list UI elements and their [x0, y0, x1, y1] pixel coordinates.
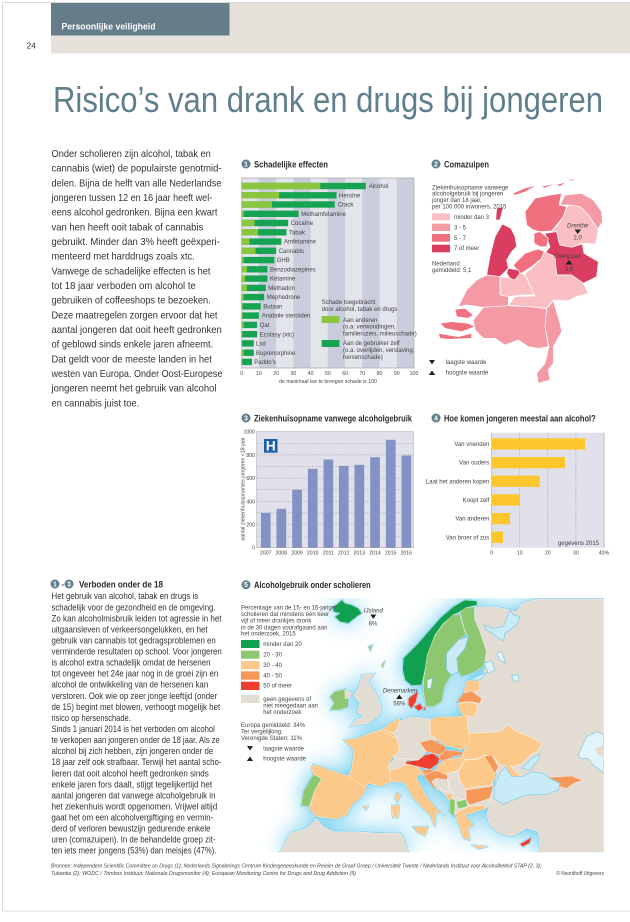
bar labels: Koopt zelf: [463, 498, 490, 504]
bar labels: Laat het anderen kopen: [426, 479, 489, 485]
map legend: minder dan 20: [263, 642, 302, 648]
text block: verboden onder de 18: Het gebruik van alcohol, tabak en drugs is: [52, 591, 199, 601]
callout: denemarken highest: [383, 688, 418, 707]
legend: harm type: (o.a. overlijden, verslaving,: [343, 348, 415, 354]
x axis: 50: [325, 371, 331, 377]
callout: denemarken highest: 56%: [393, 701, 406, 707]
intro text: aantal jongeren dat ooit heeft gedronken: [52, 325, 222, 336]
callout: drenthe lowest: Drenthe: [567, 224, 589, 230]
text block: verboden onder de 18: Zo kan alcoholmisbruik leiden tot agressie in het: [52, 613, 222, 623]
text block: verboden onder de 18: te verkopen aan jongeren onder de 18 jaar. Als ze: [52, 735, 220, 745]
x axis: 0: [240, 371, 243, 377]
chart area: [492, 433, 604, 548]
map legend: Nederland: [432, 261, 460, 267]
text block: verboden onder de 18: het ziekenhuis wordt opgenomen. Vrijwel altijd: [52, 802, 217, 812]
intro text: menteerd met harddrugs zoals xtc.: [52, 252, 195, 263]
panel: hoe komen jongeren aan alcohol: [426, 414, 610, 557]
heading: verboden onder de 18: 3: [67, 582, 71, 588]
x axis: years: [260, 550, 412, 556]
text block: verboden onder de 18: alcohol bij zich hebben, zijn jongeren onder de: [52, 746, 213, 756]
x axis: 30: [291, 371, 296, 377]
map key: lowest and highest: laagste waarde: [263, 746, 305, 752]
text block: verboden onder de 18: aantal jongeren dat vanwege alcoholgebruik in: [52, 790, 216, 800]
text block: verboden onder de 18: lieren dat ooit alcohol heeft gedronken sinds: [52, 768, 209, 778]
bar labels: Van broer of zus: [446, 535, 489, 541]
bar labels: Mephedrone: [267, 295, 301, 301]
map legend: geen gegevens of: [263, 697, 311, 703]
x axis: years: 2009: [291, 550, 303, 556]
heading: alcoholgebruik onder scholieren: Alcoholgebruik onder scholieren: [254, 580, 371, 590]
legend: harm type: (o.a. verwondingen,: [343, 325, 396, 331]
heading: verboden onder de 18: 1: [53, 582, 57, 588]
heading: bron van alcohol: 4: [434, 416, 438, 422]
averages: Europa gemiddeld: 34%: [241, 723, 306, 729]
x axis: 30: [573, 551, 579, 557]
map legend: niet meegedaan aan: [263, 703, 318, 709]
intro text: Dat geldt voor de meeste landen in het: [52, 354, 212, 365]
x axis: years: 2013: [354, 550, 365, 556]
bar labels: Ecstasy (xtc): [260, 332, 294, 338]
x axis: years: 2008: [276, 550, 287, 556]
x axis: [490, 551, 610, 557]
map legend: 40 - 50: [263, 673, 283, 679]
bar labels: Van ouders: [459, 461, 489, 467]
x axis: years: 2007: [260, 550, 272, 556]
panel: schadelijke effecten: [240, 160, 418, 385]
heading: comazuipen: Comazuipen: [444, 160, 489, 170]
x axis: 10: [517, 551, 523, 557]
heading: verboden onder de 18: -: [62, 580, 64, 589]
panel: alcoholgebruik onder scholieren: [241, 580, 604, 852]
map key: lowest and highest: laagste waarde: [446, 360, 487, 366]
legend: harm type: Aan de gebruiker zelf: [343, 341, 400, 347]
map key: lowest and highest: [429, 360, 489, 377]
map legend: gemiddeld: 5,1: [432, 268, 472, 274]
heading: schadelijke effecten: Schadelijke effecten: [254, 160, 328, 170]
intro text: cannabis (wiet) de populairste genotmid-: [52, 164, 222, 175]
intro text: gebruiken of coffeeshops te bezoeken.: [52, 296, 211, 307]
x axis: years: 2016: [401, 550, 412, 556]
legend: harm type: [322, 300, 417, 361]
callout: ijsland lowest: [364, 608, 383, 628]
x axis: 90: [394, 371, 400, 377]
bar labels: Methadon: [268, 286, 295, 292]
y axis: 600: [246, 476, 255, 482]
map intro text: jonger dan 18 jaar,: [431, 198, 482, 204]
map legend: minder dan 3: [454, 215, 490, 221]
intro text: tot 18 jaar verboden om alcohol te: [52, 281, 196, 292]
bar labels: Butaan: [263, 304, 282, 310]
x axis: 100: [410, 371, 418, 377]
intro text: jongeren neemt het gebruik van alcohol: [51, 384, 217, 395]
y axis: 800: [246, 453, 255, 459]
intro text: of geblowd sinds enkele jaren afneemt.: [52, 340, 213, 351]
bar labels: Amfetamine: [284, 240, 317, 246]
x axis: years: 2015: [385, 550, 397, 556]
bar labels: Cocaïne: [291, 221, 314, 227]
bar labels: Benzodiazepines: [270, 267, 316, 273]
sources: [51, 864, 542, 877]
x axis: 20: [273, 371, 279, 377]
header band: [51, 3, 630, 54]
x axis: 10: [256, 371, 262, 377]
heading: bron van alcohol: Hoe komen jongeren meestal aan alcohol?: [444, 414, 596, 424]
intro text: [51, 149, 223, 409]
y axis: 1000: [243, 430, 255, 436]
map legend: het onderzoek: [263, 710, 302, 716]
callout: drenthe lowest: 2,0: [574, 236, 583, 242]
map intro text: per 100.000 inwoners, 2015: [432, 204, 507, 210]
heading: schadelijke effecten: 1: [244, 162, 248, 168]
map key: lowest and highest: hoogste waarde: [263, 757, 307, 763]
callout: overijssel highest: [554, 254, 581, 273]
bar chart: sources: [492, 438, 585, 543]
map legend intro: scholieren dat minstens één keer: [241, 612, 329, 618]
legend: harm type: Schade toegebracht: [322, 300, 376, 306]
legend: harm type: hersenschade): [343, 355, 383, 361]
map legend intro: het onderzoek, 2015: [241, 632, 296, 638]
map legend intro: in de 30 dagen voorafgaand aan: [241, 625, 327, 631]
y axis: aantal ziekenhuisopnames jongeren <18 jaar: [240, 437, 246, 541]
map key: lowest and highest: hoogste waarde: [446, 371, 489, 377]
heading: ziekenhuisopname: 3: [244, 416, 248, 422]
x axis: 40%: [599, 551, 610, 557]
heading: verboden onder de 18: Verboden onder de 18: [79, 580, 163, 590]
heading: ziekenhuisopname: Ziekenhuisopname vanwege alcoholgebruik: [254, 414, 413, 424]
sources: Tubantia (2); WODC / Trimbos Instituut: Nationale Drugsmonitor (4); European Monitoring Centre for Drugs and Drug Addiction (5): [51, 871, 356, 877]
bar labels: [254, 184, 388, 366]
bar labels: Methamfetamine: [301, 212, 347, 218]
copyright: © Noordhoff Uitgevers: [556, 870, 604, 877]
data note: gegevens 2015: [558, 541, 600, 547]
callout: overijssel highest: Overijssel: [554, 254, 581, 260]
legend: harm type: door alcohol, tabak en drugs: [322, 307, 397, 313]
bar labels: Heroïne: [339, 193, 361, 199]
legend: harm type: Aan anderen: [343, 318, 377, 324]
heading: verboden onder de 18: [50, 580, 163, 590]
intro text: Vanwege de schadelijke effecten is het: [52, 266, 211, 277]
x axis: 20: [545, 551, 551, 557]
map legend: 7 of meer: [454, 246, 479, 252]
text block: verboden onder de 18: tot ongeveer het 24e jaar nog in de groei zijn en: [52, 669, 218, 679]
y axis: 200: [246, 522, 255, 528]
bar labels: Van anderen: [455, 517, 489, 523]
bar chart: harm scores: [242, 183, 366, 365]
text block: verboden onder de 18: de 15) begint met blowen, verhoogt mogelijk het: [52, 702, 221, 712]
bar labels: Ketamine: [270, 277, 296, 283]
heading: alcoholgebruik onder scholieren: 5: [244, 582, 248, 589]
bar labels: Buprenorphine: [256, 351, 296, 357]
heading: comazuipen: 2: [434, 162, 438, 168]
intro text: Onder scholieren zijn alcohol, tabak en: [52, 149, 211, 160]
bar labels: Crack: [338, 203, 354, 209]
map legend intro: [241, 606, 336, 638]
map key: lowest and highest: [247, 746, 307, 763]
callout: denemarken highest: Denemarken: [383, 688, 418, 694]
bar labels: Tabak: [289, 230, 306, 236]
callout: ijsland lowest: IJsland: [364, 608, 383, 614]
bar chart: admissions: [261, 440, 411, 548]
map legend: 20 - 30: [263, 653, 283, 659]
text block: verboden onder de 18: derd of verloren bewustzijn gedurende enkele: [52, 824, 210, 834]
averages: [241, 723, 306, 742]
intro text: delen. Bijna de helft van alle Nederlandse: [52, 178, 222, 189]
map intro text: alcoholgebruik bij jongeren: [432, 192, 503, 198]
bar labels: Paddo’s: [254, 360, 276, 366]
x axis: years: 2014: [369, 550, 381, 556]
bar labels: Van vrienden: [454, 442, 489, 448]
chart area: [257, 432, 413, 548]
x axis: 0: [490, 551, 493, 557]
text block: verboden onder de 18: ten iets meer jongens (53%) dan meisjes (47%).: [52, 846, 216, 856]
callout: drenthe lowest: [567, 224, 589, 242]
icon: hospital: H: [266, 439, 276, 454]
intro text: en cannabis juist toe.: [52, 398, 139, 409]
intro text: Deze maatregelen zorgen ervoor dat het: [52, 310, 218, 321]
text block: verboden onder de 18: alcohol de ontwikkeling van de hersenen kan: [52, 680, 208, 690]
x axis: 80: [377, 371, 382, 377]
map intro text: [431, 185, 509, 210]
y axis: 0: [252, 546, 255, 552]
bar labels: Cannabis: [279, 249, 304, 255]
page number: 24: [26, 40, 36, 50]
map intro text: Ziekenhuisopname vanwege: [432, 185, 509, 191]
text block: verboden onder de 18: 18 jaar zelf ook strafbaar. Terwijl het aantal scho-: [52, 757, 222, 767]
text block: verboden onder de 18: enkele jaren fors daalt, stijgt tegelijkertijd het: [52, 779, 213, 789]
map legend: 50 of meer: [263, 684, 292, 690]
callout: overijssel highest: 3,6: [565, 267, 574, 273]
map legend: 30 - 40: [263, 663, 283, 669]
map legend: 3 - 5: [454, 226, 467, 232]
sources: Bronnen: Independent Scientific Committee on Drugs (1); Nederlands Signalerings Centrum Kindergeneeskunde en Reinier de Graaf Groep / Universiteit Twente / Nederlands Instituut voor Alcoholbeleid STAP (2, 3);: [51, 864, 542, 870]
bar labels: Lsd: [256, 342, 266, 348]
intro text: gebruikt. Minder dan 3% heeft geëxperi-: [52, 237, 220, 248]
x axis: 40: [308, 371, 314, 377]
intro text: eens alcohol gedronken. Bijna een kwart: [52, 208, 218, 219]
bar labels: GHB: [277, 258, 290, 264]
text block: verboden onder de 18: verstoren. Ook wie op zeer jonge leeftijd (onder: [52, 691, 217, 701]
panel: comazuipen: [429, 160, 603, 383]
averages: Ter vergelijking:: [241, 729, 283, 735]
x axis: years: 2010: [307, 550, 319, 556]
text block: verboden onder de 18: Sinds 1 januari 2014 is het verboden om alcohol: [52, 724, 215, 734]
text block: verboden onder de 18: [50, 580, 222, 856]
x axis: years: 2012: [338, 550, 350, 556]
map legend: [241, 640, 318, 716]
callout: ijsland lowest: 8%: [369, 622, 378, 628]
panel: ziekenhuisopname: [240, 414, 413, 556]
x axis: [240, 371, 418, 385]
text block: verboden onder de 18: is alcohol extra schadelijk omdat de hersenen: [52, 658, 210, 668]
text block: verboden onder de 18: schadelijk voor de gezondheid en de omgeving.: [52, 602, 216, 612]
map legend intro: vijf of meer drankjes dronk: [241, 619, 312, 625]
map: europe: [280, 599, 604, 852]
intro text: jongeren tussen 12 en 16 jaar heeft wel-: [51, 193, 212, 204]
map legend: [432, 213, 490, 274]
header band: Persoonlijke veiligheid: [62, 22, 156, 32]
averages: Verenigde Staten: 11%: [241, 736, 303, 742]
x axis: de maximaal toe te brengen schade is 100: [279, 379, 377, 385]
y axis: 400: [246, 499, 255, 505]
text block: verboden onder de 18: gebruik van cannabis tot gedragsproblemen en: [52, 636, 216, 646]
map: netherlands: [438, 179, 603, 383]
text block: verboden onder de 18: uren (comazuipen). In de behandelde groep zit-: [52, 835, 216, 845]
bar labels: Anabole steroïden: [262, 314, 310, 320]
legend: harm type: familieruzies, milieuschade): [343, 332, 417, 338]
x axis: years: 2011: [323, 550, 334, 556]
bar labels: [426, 442, 490, 541]
bar labels: Alcohol: [369, 184, 388, 190]
map legend: 5 - 7: [454, 236, 467, 242]
text block: verboden onder de 18: risico op hersenschade.: [52, 713, 131, 723]
x axis: 60: [342, 371, 348, 377]
text block: verboden onder de 18: gaat het om een alcoholvergiftiging en vermin-: [52, 812, 213, 822]
intro text: van hen heeft ooit tabak of cannabis: [52, 222, 203, 233]
map legend intro: Percentage van de 15- en 16-jarige: [241, 606, 336, 612]
heading: comazuipen: [432, 160, 489, 170]
bar labels: Qat: [260, 323, 270, 329]
y axis: [240, 430, 255, 552]
text block: verboden onder de 18: verminderde resultaten op school. Voor jongeren: [52, 646, 222, 656]
text block: verboden onder de 18: uitgaansleven of verkeersongelukken, en het: [52, 624, 208, 634]
chart background bands: [242, 178, 414, 368]
x axis: 70: [359, 371, 365, 377]
intro text: westen van Europa. Onder Oost-Europese: [51, 369, 223, 380]
